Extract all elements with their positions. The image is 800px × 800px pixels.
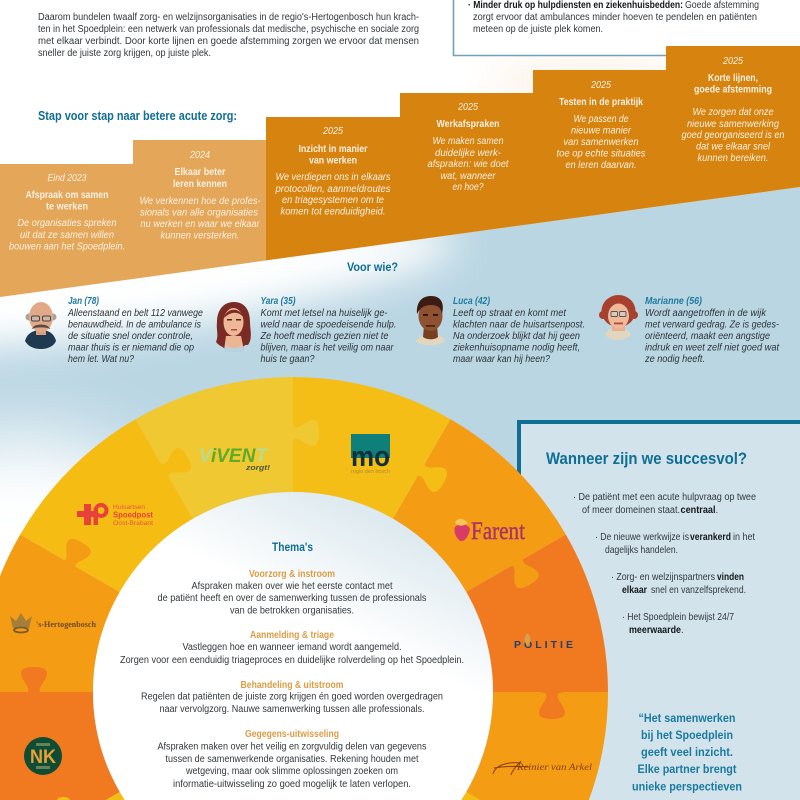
- text: Luca: [452, 296, 585, 365]
- logo: NK: [24, 737, 62, 775]
- text block: intro: met elkaar verbindt. Door korte lijnen en goede afstemming zorgen we ervoor dat mensen: [38, 36, 419, 47]
- list: success criteria: in het: [733, 532, 755, 543]
- step 5: van samenwerken: [564, 137, 638, 148]
- theme: aanmelding: [120, 630, 464, 666]
- text: Marianne: oriënteerd, maakt een angstige: [645, 331, 770, 342]
- text: Marianne: met verward gedrag. Ze is gedes-: [645, 320, 780, 330]
- logo: Huisartsen Spoedpost: Huisartsen: [113, 504, 145, 511]
- list: success criteria: elkaar: [622, 585, 647, 596]
- text: Marianne: Marianne (56): [645, 296, 702, 307]
- step 6: goed georganiseerd is en: [682, 130, 784, 141]
- step 4: 2025: [457, 102, 479, 113]
- step 6: nieuwe samenwerking: [687, 119, 780, 130]
- logo: NK: NK: [30, 747, 56, 768]
- text: Jan: Alleenstaand en belt 112 vanwege: [67, 308, 203, 319]
- text block: intro: ten in het Spoedplein: een netwerk van professionals dat medische, psychische en sociale zorg: [38, 24, 419, 35]
- text: Yara: [260, 296, 396, 365]
- step 5: 2025: [590, 80, 612, 91]
- theme: aanmelding: Aanmelding & triage: [250, 630, 334, 641]
- quote: bij het Spoedplein: [641, 728, 733, 742]
- logo: Politie: [514, 633, 573, 651]
- step 1: Eind 2023: [48, 173, 87, 184]
- logo: 's-Hertogenbosch: 's-Hertogenbosch: [36, 620, 97, 629]
- step 3: komen tot eenduidigheid.: [280, 206, 386, 218]
- step 3: van werken: [309, 156, 357, 166]
- text: Luca: Leeft op straat en komt met: [453, 308, 567, 319]
- text: bullet top box: zorgt ervoor dat ambulances minder hoeven te pendelen en patiënten: [473, 12, 757, 23]
- text: Marianne: indruk en weet zelf niet goed wat: [645, 342, 780, 354]
- quote: “Het samenwerken: [638, 711, 736, 725]
- logo: Vivent: zorgt!: [245, 463, 271, 472]
- text: Luca: Na onderzoek blijkt dat hij geen: [453, 331, 580, 342]
- theme: voorzorg: van de betrokken organisaties.: [230, 606, 354, 616]
- text: Luca: maar waar kan hij heen?: [453, 354, 550, 365]
- step 6: dat we elkaar snel: [696, 142, 771, 152]
- icon: Yara portrait: [216, 302, 251, 352]
- step 6: 2025: [722, 56, 744, 67]
- quote: geeft veel inzicht.: [641, 745, 733, 759]
- step 4: afspraken: wie doet: [428, 159, 510, 170]
- quote: unieke perspectieven: [632, 780, 742, 794]
- theme: gegevens: tussen de samenwerkende organisaties. Rekening houden met: [166, 754, 419, 765]
- panel: top white box: [453, 0, 800, 56]
- text: Jan: [67, 296, 203, 365]
- list: success criteria: meerwaarde: [629, 625, 682, 636]
- theme: gegevens: informatie-uitwisseling zo goed mogelijk te laten verlopen.: [173, 779, 411, 790]
- logo: Reinier van Arkel: Reinier van Arkel: [516, 763, 592, 773]
- step 2: kunnen versterken.: [160, 230, 240, 242]
- text: Yara: Komt met letsel na huiselijk ge-: [260, 308, 388, 319]
- text: Jan: de situatie snel onder controle,: [68, 331, 193, 342]
- theme: gegevens: [158, 729, 427, 790]
- persona: Marianne: [599, 295, 780, 365]
- text: Luca: klachten naar de huisartsenpost.: [453, 320, 585, 330]
- logo: Huisartsen Spoedpost: Oost-Brabant: [113, 520, 153, 527]
- text: Jan: benauwdheid. In de ambulance is: [68, 320, 201, 330]
- staircase: [0, 46, 800, 297]
- step 2: 2024: [189, 150, 211, 161]
- step 5: nieuwe manier: [571, 126, 632, 136]
- heading: voor wie: Voor wie?: [347, 260, 398, 274]
- step 5: [533, 70, 666, 224]
- step 2: leren kennen: [173, 179, 227, 190]
- theme: gegevens: Gegegens-uitwisseling: [245, 729, 339, 740]
- list: success criteria: .: [716, 505, 718, 516]
- inner circle: thema's: [93, 492, 493, 800]
- icon: Jan portrait: [25, 302, 56, 349]
- quote: [632, 711, 742, 794]
- step 2: [133, 140, 266, 279]
- step 1: uit dat ze samen willen: [20, 230, 114, 241]
- text: Yara: blijven, maar is het veilig om naar: [260, 342, 394, 354]
- step 6: Korte lijnen,: [708, 73, 758, 84]
- heading: wanneer: Wanneer zijn we succesvol?: [546, 450, 747, 468]
- heading: stap voor stap: Stap voor stap naar betere acute zorg:: [38, 109, 237, 123]
- text: Yara: weld naar de spoedeisende hulp.: [260, 320, 396, 330]
- puzzle tabs: [21, 420, 565, 719]
- persona: Luca: [416, 296, 585, 365]
- step 6: goede afstemming: [694, 84, 772, 96]
- theme: voorzorg: Afspraken maken over wie het eerste contact met: [192, 581, 393, 592]
- theme: gegevens: wetgeving, maar ook slimme oplossingen zoeken om: [185, 766, 398, 777]
- theme: behandeling: Regelen dat patiënten de juiste zorg krijgen én goed worden overgedragen: [141, 692, 443, 702]
- theme: voorzorg: [158, 569, 427, 616]
- text: Luca: ziekenhuisopname nodig heeft,: [452, 342, 580, 354]
- theme: aanmelding: Zorgen voor een eenduidig triageproces en duidelijke rolverdeling op het Spoedplein.: [120, 655, 464, 666]
- step 1: [0, 164, 133, 297]
- logo: Reinier van Arkel: [493, 761, 592, 775]
- puzzle ring: [0, 377, 608, 800]
- list: success criteria: .: [681, 625, 684, 636]
- step 1: De organisaties spreken: [18, 218, 116, 229]
- text: Marianne: [644, 296, 780, 365]
- text: Luca: Luca (42): [453, 296, 490, 307]
- step 2: Elkaar beter: [174, 167, 226, 178]
- step 4: [400, 93, 533, 242]
- logo: Politie: POLITIE: [514, 639, 573, 651]
- step 3: protocollen, aanmeldroutes: [275, 184, 391, 195]
- background: blue slanted area: [0, 180, 800, 800]
- logo: Farent: [454, 518, 525, 545]
- theme: behandeling: naar vervolgzorg. Nauwe samenwerking tussen alle professionals.: [160, 704, 424, 715]
- step 2: We verkennen hoe de profes-: [140, 196, 261, 207]
- logo: Huisartsen Spoedpost: [77, 504, 153, 527]
- text: Jan: hem let. Wat nu?: [68, 354, 134, 365]
- step 2: nu werken en waar we elkaar: [140, 219, 260, 230]
- list: success criteria: · De nieuwe werkwijze is: [595, 532, 689, 543]
- background: soft peach glow: [490, 57, 690, 113]
- step 2: sionals van alle organisaties: [140, 208, 258, 218]
- step 5: We passen de: [574, 114, 629, 125]
- text: Jan: maar thuis is er niemand die op: [68, 342, 195, 354]
- text block: intro: sneller de juiste zorg krijgen, op juiste plek.: [38, 48, 211, 59]
- text: bullet top box: meteen op de juiste plek komen.: [473, 24, 603, 35]
- step 1: Afspraak om samen: [26, 190, 109, 201]
- persona: Yara: [216, 296, 396, 365]
- list: success criteria: · De patiënt met een acute hulpvraag op twee: [573, 492, 756, 503]
- step 6: [666, 46, 800, 205]
- list: success criteria: verankerd: [690, 532, 731, 543]
- step 6: We zorgen dat onze: [692, 107, 774, 118]
- step 1: te werken: [46, 202, 88, 212]
- text: Marianne: ze nodig heeft.: [644, 354, 705, 365]
- list: success criteria: dagelijks handelen.: [605, 545, 678, 556]
- icon: Marianne portrait: [599, 295, 638, 340]
- theme: behandeling: Behandeling & uitstroom: [240, 680, 344, 691]
- list: success criteria: · Het Spoedplein bewijst 24/7: [622, 612, 734, 623]
- list: success criteria: · Zorg- en welzijnspartners: [611, 572, 715, 583]
- step 5: toe op echte situaties: [556, 148, 646, 160]
- step 3: 2025: [322, 126, 344, 137]
- text: Jan: Jan (78): [68, 296, 99, 307]
- text: Marianne: Wordt aangetroffen in de wijk: [645, 308, 767, 319]
- step 4: Werkafspraken: [436, 119, 500, 130]
- theme: voorzorg: de patiënt heeft en over de samenwerking tussen de professionals: [158, 593, 427, 604]
- logo: MO: mo: [351, 441, 390, 473]
- text: bullet top box: Goede afstemming: [685, 0, 759, 11]
- step 5: Testen in de praktijk: [559, 97, 643, 108]
- logo: 's-Hertogenbosch: [10, 613, 97, 632]
- list: success criteria: snel en vanzelfsprekend.: [651, 585, 746, 596]
- step 4: We maken samen: [432, 136, 504, 147]
- logo: MO: regio den bosch: [351, 469, 390, 475]
- step 5: en leren daarvan.: [566, 160, 636, 171]
- list: success criteria: vinden: [717, 572, 744, 583]
- icon: Luca portrait: [416, 296, 445, 345]
- step 3: [266, 117, 400, 260]
- logo: Vivent: ViVENT: [199, 446, 268, 467]
- step 3: We verdiepen ons in elkaars: [276, 172, 391, 183]
- text: Yara: Ze hoeft medisch gezien niet te: [260, 331, 389, 342]
- persona: Jan: [25, 296, 203, 365]
- list: success criteria: centraal: [680, 505, 716, 516]
- theme: gegevens: Afspraken maken over het veilig en zorgvuldig delen van gegevens: [158, 742, 427, 752]
- text: Yara: huis te gaan?: [260, 354, 315, 365]
- step 4: wat, wanneer: [440, 171, 496, 182]
- theme: aanmelding: Vastleggen hoe en wanneer iemand wordt aangemeld.: [182, 642, 402, 653]
- step 3: Inzicht in manier: [298, 144, 368, 155]
- text: Yara: Yara (35): [260, 296, 296, 307]
- heading: thema's: Thema's: [272, 540, 313, 554]
- text: bullet top box: [468, 0, 759, 35]
- theme: voorzorg: Voorzorg & instroom: [249, 569, 335, 580]
- text block: intro: [38, 12, 419, 59]
- step 1: bouwen aan het Spoedplein.: [9, 242, 125, 252]
- segment colours: [0, 377, 608, 800]
- step 4: en hoe?: [452, 182, 484, 193]
- theme: behandeling: [141, 680, 443, 715]
- step 3: en triagesystemen om te: [282, 195, 385, 206]
- logo: Farent: Farent: [471, 518, 525, 545]
- text: bullet top box: · Minder druk op hulpdiensten en ziekenhuisbedden:: [468, 0, 683, 11]
- list: success criteria: of meer domeinen staat.: [582, 505, 680, 516]
- step 4: duidelijke werk-: [435, 148, 502, 159]
- panel: wanneer zijn we succesvol: [519, 422, 800, 800]
- list: success criteria: [573, 492, 756, 636]
- logo: Huisartsen Spoedpost: Spoedpost: [113, 510, 153, 520]
- step 6: kunnen bereiken.: [698, 153, 768, 164]
- text block: intro: Daarom bundelen twaalf zorg- en welzijnsorganisaties in de regio's-Hertogenbosch hun krach-: [38, 12, 419, 23]
- quote: Elke partner brengt: [638, 762, 736, 776]
